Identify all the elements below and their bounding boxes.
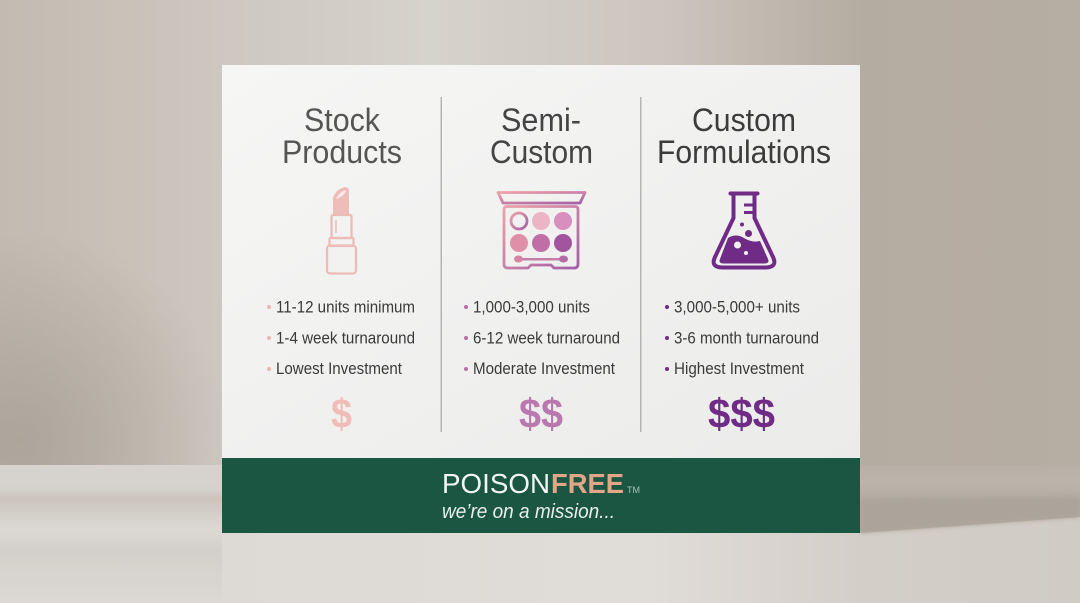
list: Semi-Custom details: 6-12 week turnaround — [473, 328, 620, 347]
list: Custom details: Highest Investment — [674, 359, 804, 378]
logo: POISONFREE — [442, 468, 640, 499]
cost: $$$: $$$ — [708, 390, 775, 437]
tagline: we’re on a mission... — [442, 501, 615, 523]
heading: Semi-Custom: Custom — [490, 134, 593, 170]
card — [222, 65, 860, 533]
list: Custom details — [665, 298, 819, 378]
heading: Stock Products: Products — [282, 134, 402, 170]
cost: $: $ — [331, 390, 352, 437]
list: Semi-Custom details: 1,000-3,000 units — [473, 298, 590, 317]
divider lines — [440, 97, 642, 432]
logo: POISONFREE: POISON — [442, 468, 550, 499]
icon: flask — [714, 194, 774, 268]
logo: POISONFREE: TM — [627, 485, 640, 496]
column: Stock Products — [267, 102, 415, 437]
list: Stock details: Lowest Investment — [276, 359, 402, 378]
heading: Custom Formulations — [657, 102, 831, 170]
list: Custom details: 3-6 month turnaround — [674, 328, 819, 347]
heading: Semi-Custom: Semi- — [501, 102, 581, 138]
list: Semi-Custom details — [464, 298, 620, 378]
heading: Stock Products: Stock — [304, 102, 381, 138]
list: Stock details: 1-4 week turnaround — [276, 328, 415, 347]
cost: $$: $$ — [519, 390, 563, 437]
heading: Stock Products — [282, 102, 402, 170]
footer band — [222, 458, 860, 533]
list: Stock details — [267, 298, 415, 378]
logo: POISONFREE: FREE — [551, 468, 624, 499]
icon: eyeshadow palette — [498, 192, 585, 268]
card shadow — [860, 497, 1080, 533]
list: Custom details: 3,000-5,000+ units — [674, 298, 800, 317]
list: Stock details: 11-12 units minimum — [276, 298, 415, 317]
column: Semi-Custom — [464, 102, 620, 437]
column: Custom Formulations — [657, 102, 831, 437]
list: Semi-Custom details: Moderate Investment — [473, 359, 615, 378]
icon: lipstick — [327, 187, 356, 274]
heading: Custom Formulations: Custom — [692, 102, 796, 138]
heading: Custom Formulations: Formulations — [657, 134, 831, 170]
heading: Semi-Custom — [490, 102, 593, 170]
